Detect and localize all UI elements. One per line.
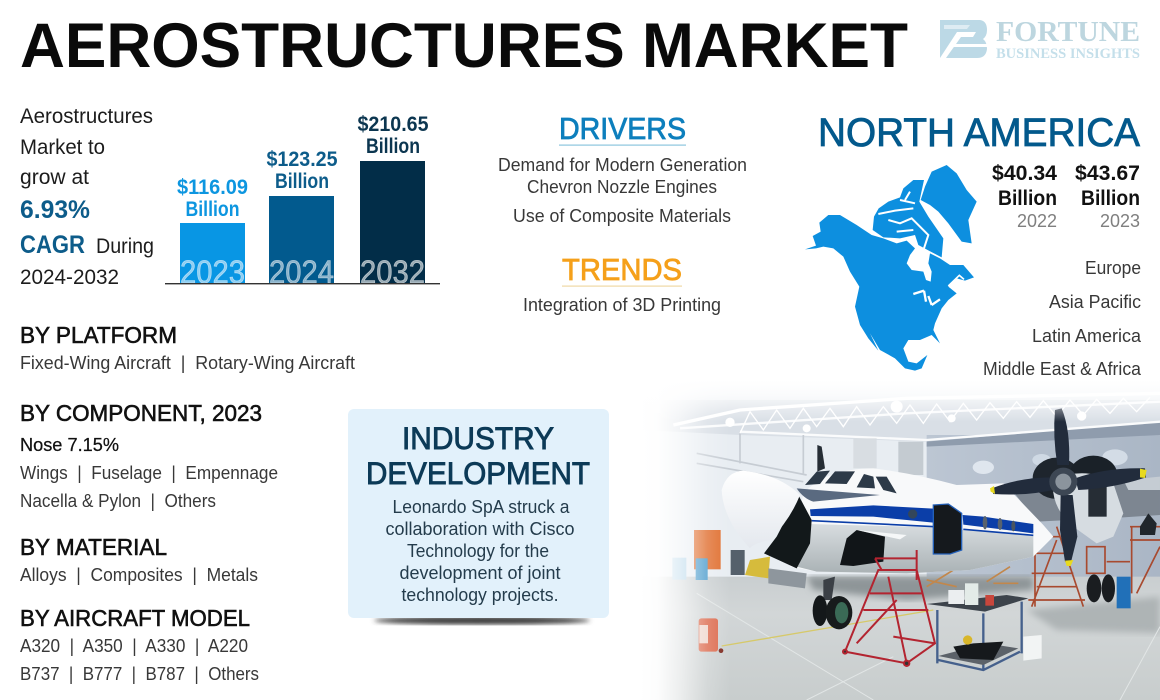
segment: by component xyxy=(20,400,278,511)
rear wing and engine xyxy=(1013,456,1160,543)
logo: Fortune Business Insights: BUSINESS INSIGHTS xyxy=(996,46,1140,62)
bar: 2032: 2032 xyxy=(360,254,425,290)
CAGR text block: Market to xyxy=(20,136,105,159)
panel body text: Technology for the xyxy=(407,540,549,561)
CAGR text block: 2024-2032 xyxy=(20,266,119,289)
panel body text: development of joint xyxy=(400,562,560,583)
region heading: NORTH AMERICA xyxy=(818,111,1141,155)
bar: 2024 xyxy=(266,148,338,290)
segment: by aircraft model: B737 | B777 | B787 | Others xyxy=(20,663,259,684)
other regions list: Europe xyxy=(1085,257,1141,278)
CAGR text block: CAGR xyxy=(20,231,85,259)
drivers: Demand for Modern Generation xyxy=(498,154,747,175)
red step ladder xyxy=(843,550,935,666)
other regions list: Middle East & Africa xyxy=(983,358,1142,379)
trends xyxy=(523,252,721,315)
regional values: 2023 xyxy=(1100,210,1140,231)
propeller xyxy=(990,408,1147,566)
segment: by aircraft model: A320 | A350 | A330 | A220 xyxy=(20,635,248,656)
bar: 2023 xyxy=(177,176,248,290)
bar: 2024: Billion xyxy=(275,170,329,193)
bar: 2032: $210.65 xyxy=(358,113,429,136)
segment: by material: Alloys | Composites | Metals xyxy=(20,564,258,585)
panel heading: INDUSTRY xyxy=(402,420,554,456)
CAGR text block: grow at xyxy=(20,166,89,189)
bar: 2032: Billion xyxy=(366,135,420,158)
trends: Integration of 3D Printing xyxy=(523,294,721,315)
panel heading: DEVELOPMENT xyxy=(366,455,590,491)
tail fin xyxy=(817,445,825,472)
drivers: DRIVERS xyxy=(559,111,686,146)
logo: Fortune Business Insights: FORTUNE xyxy=(996,17,1140,48)
map: North America xyxy=(805,165,977,371)
arctic islands xyxy=(873,180,943,257)
regional values: 2022 xyxy=(1017,210,1057,231)
drivers: Use of Composite Materials xyxy=(513,205,731,226)
segment: by component: Wings | Fuselage | Empennage xyxy=(20,462,278,483)
panel body text xyxy=(386,496,574,605)
segment: by material: BY MATERIAL xyxy=(20,534,167,560)
fire extinguisher xyxy=(699,618,723,653)
fades xyxy=(640,380,1160,700)
greenland xyxy=(921,165,977,243)
CAGR text block: Aerostructures xyxy=(20,105,153,128)
ground equipment behind aircraft xyxy=(927,527,1160,607)
nose radome xyxy=(722,471,812,588)
CAGR text block xyxy=(20,105,154,289)
hangar background xyxy=(640,380,1160,700)
drivers xyxy=(498,111,747,226)
regional values: Billion xyxy=(1081,187,1140,210)
trends: TRENDS xyxy=(562,252,682,287)
panel body text: collaboration with Cisco xyxy=(386,518,574,539)
segment: by material xyxy=(20,534,258,585)
photo: aircraft in hangar xyxy=(640,380,1160,700)
title: AEROSTRUCTURES MARKET xyxy=(20,11,908,81)
panel body text: Leonardo SpA struck a xyxy=(392,496,570,517)
logo: Fortune Business Insights xyxy=(940,17,1140,62)
other regions list: Asia Pacific xyxy=(1049,291,1141,312)
bar: 2024: 2024 xyxy=(269,254,334,290)
arctic channels xyxy=(878,192,928,248)
work table xyxy=(927,583,1042,670)
CAGR text block: During xyxy=(96,235,154,258)
bar: 2023: 2023 xyxy=(180,254,245,290)
panel: industry development xyxy=(348,409,609,624)
segment: by platform: Fixed-Wing Aircraft | Rotary-Wing Aircraft xyxy=(20,352,355,373)
panel heading xyxy=(366,420,590,491)
other regions list xyxy=(983,257,1142,379)
segment: by aircraft model: BY AIRCRAFT MODEL xyxy=(20,605,250,631)
great lakes xyxy=(913,291,940,305)
regional values: $43.67 xyxy=(1075,162,1140,185)
segment: by platform xyxy=(20,322,355,373)
fuselage xyxy=(790,468,1053,573)
regional values: $40.34 xyxy=(992,162,1057,185)
segment: by component: Nose 7.15% xyxy=(20,434,119,455)
bar: 2023: $116.09 xyxy=(177,176,248,199)
CAGR text block: 6.93% xyxy=(20,196,90,224)
regional values xyxy=(992,162,1140,231)
mainland xyxy=(805,215,974,371)
panel body text: technology projects. xyxy=(402,584,558,605)
segment: by aircraft model xyxy=(20,605,259,684)
landing gear xyxy=(813,577,852,629)
segment: by platform: BY PLATFORM xyxy=(20,322,177,348)
bar: 2024: $123.25 xyxy=(266,148,338,171)
bar: 2032 xyxy=(358,113,429,290)
other regions list: Latin America xyxy=(1032,325,1142,346)
drivers: Chevron Nozzle Engines xyxy=(527,176,717,197)
segment: by component: BY COMPONENT, 2023 xyxy=(20,400,262,426)
regional values: Billion xyxy=(998,187,1057,210)
bar chart xyxy=(165,113,440,290)
bar: 2023: Billion xyxy=(186,198,240,221)
segment: by component: Nacella & Pylon | Others xyxy=(20,490,216,511)
